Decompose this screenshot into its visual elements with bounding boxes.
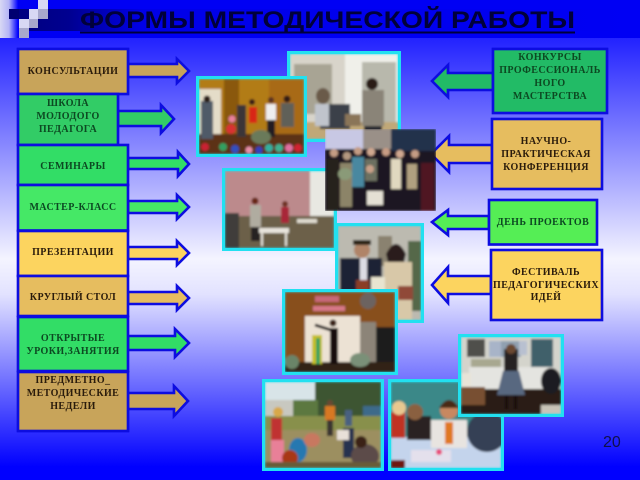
box: день проектов: ДЕНЬ ПРОЕКТОВ — [497, 217, 589, 228]
photo: students at table — [388, 379, 507, 471]
box: фестиваль педагогических идей: ИДЕЙ — [531, 291, 561, 303]
photo: group with certificates — [325, 129, 436, 211]
box: презентации — [18, 231, 128, 276]
box: научно-практическая конференция: ПРАКТИЧЕСКАЯ — [501, 149, 591, 160]
box: фестиваль педагогических идей — [491, 250, 602, 320]
photo: children on stage with balloons — [196, 76, 307, 157]
arrow: конкурсы — [432, 65, 493, 97]
arrow: круглый стол — [128, 286, 189, 310]
box: открытые уроки, занятия: УРОКИ,ЗАНЯТИЯ — [26, 346, 120, 357]
arrow: мастер-класс — [128, 195, 189, 219]
box: семинары — [18, 145, 128, 185]
arrow: семинары — [128, 152, 189, 176]
box: конкурсы профессионального мастерства — [493, 49, 607, 113]
box: круглый стол: КРУГЛЫЙ СТОЛ — [30, 291, 116, 303]
arrow: фестиваль — [432, 267, 491, 303]
arrow: предметно-методические недели — [128, 386, 188, 416]
box: фестиваль педагогических идей: ФЕСТИВАЛЬ — [512, 267, 580, 278]
box: конкурсы профессионального мастерства: МАСТЕРСТВА — [513, 91, 588, 102]
arrow: презентации — [128, 241, 189, 265]
arrow: конференция — [431, 136, 492, 172]
box: открытые уроки, занятия — [18, 317, 128, 371]
arrow: открытые уроки — [128, 329, 189, 357]
box: предметно-методические недели: МЕТОДИЧЕСКИЕ — [27, 388, 119, 399]
box: школа молодого педагога: ПЕДАГОГА — [39, 124, 98, 135]
box: день проектов — [489, 200, 597, 244]
box: школа молодого педагога — [18, 94, 118, 145]
box: мастер-класс — [18, 185, 128, 230]
arrow: день проектов — [432, 210, 489, 235]
box: конкурсы профессионального мастерства: НОГО — [534, 78, 566, 89]
box: предметно-методические недели: НЕДЕЛИ — [50, 401, 96, 412]
corner decoration — [0, 0, 640, 38]
box: научно-практическая конференция: КОНФЕРЕНЦИЯ — [503, 162, 589, 173]
page number: 20 — [603, 434, 621, 451]
photo: stage performance — [282, 289, 398, 375]
title: ФОРМЫ МЕТОДИЧЕСКОЙ РАБОТЫ — [80, 6, 575, 34]
box: школа молодого педагога: МОЛОДОГО — [36, 111, 100, 122]
box: школа молодого педагога: ШКОЛА — [47, 98, 89, 109]
box: научно-практическая конференция: НАУЧНО- — [521, 136, 571, 147]
box: конкурсы профессионального мастерства: ПРОФЕССИОНАЛЬ — [499, 65, 601, 76]
box: круглый стол — [18, 276, 128, 316]
box: мастер-класс: МАСТЕР-КЛАСС — [29, 202, 117, 213]
arrow: школа молодого педагога — [118, 105, 174, 133]
box: презентации: ПРЕЗЕНТАЦИИ — [32, 247, 114, 258]
photo: man and woman with awards — [335, 223, 424, 323]
box: фестиваль педагогических идей: ПЕДАГОГИЧЕСКИХ — [493, 280, 599, 291]
box: семинары: СЕМИНАРЫ — [40, 161, 106, 172]
box: консультации: КОНСУЛЬТАЦИИ — [28, 66, 118, 77]
box: научно-практическая конференция — [492, 119, 602, 189]
box: открытые уроки, занятия: ОТКРЫТЫЕ — [41, 333, 105, 344]
box: предметно-методические недели — [18, 372, 128, 431]
arrow: консультации — [128, 59, 189, 83]
box: конкурсы профессионального мастерства: КОНКУРСЫ — [518, 52, 582, 63]
photo: classroom with pink curtains — [222, 168, 337, 251]
photo: children outdoors — [262, 379, 384, 471]
photo: teacher at classroom board — [458, 334, 564, 417]
left column: forms of work — [18, 49, 189, 431]
right column: events — [431, 49, 607, 320]
photo: teacher in office — [287, 51, 401, 142]
box: предметно-методические недели: ПРЕДМЕТНО_ — [36, 375, 111, 386]
box: консультации — [18, 49, 128, 94]
